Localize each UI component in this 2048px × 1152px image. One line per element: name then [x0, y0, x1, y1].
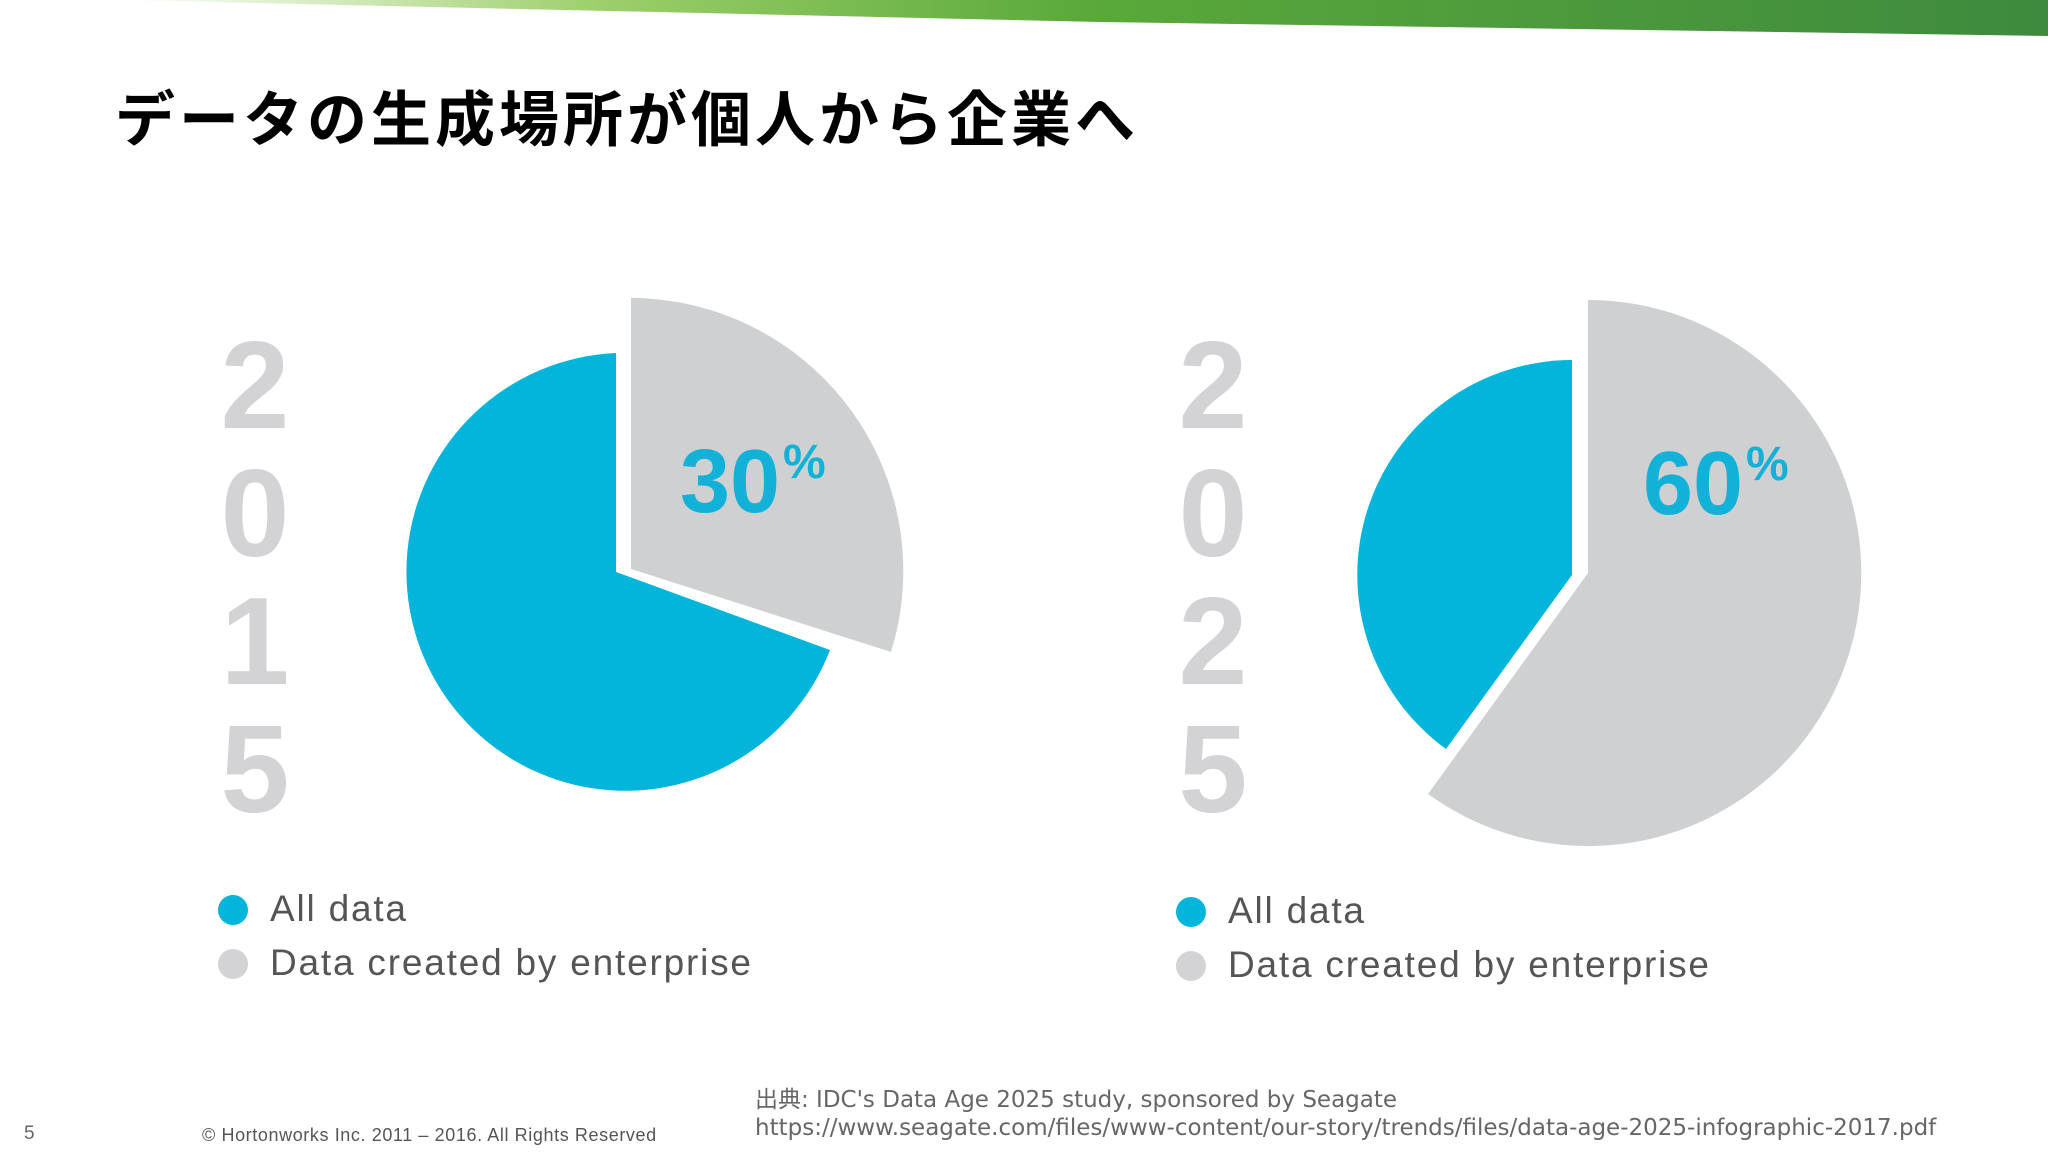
year label 2015: 1 — [221, 573, 289, 711]
title: データの生成場所が個人から企業へ — [115, 87, 1139, 154]
year label 2025: 2 — [1179, 573, 1247, 711]
pie chart 2015 — [406, 298, 904, 791]
chart panel: 2025 — [1176, 300, 1862, 985]
source citation: 出典: IDC's Data Age 2025 study, sponsored by Seagate — [755, 1087, 1397, 1113]
pie chart 2025: 60 — [1643, 434, 1743, 534]
top green banner — [147, 0, 2048, 36]
pie chart 2025 — [1357, 300, 1862, 846]
year label 2025 — [1179, 317, 1247, 839]
year label 2015: 2 — [221, 317, 289, 455]
chart panel: 2015 — [218, 298, 904, 983]
pie chart 2015: % — [783, 436, 826, 489]
legend 2025 — [1176, 890, 1711, 985]
year label 2015 — [221, 317, 289, 839]
legend 2025: Data created by enterprise — [1228, 944, 1711, 985]
pie chart 2015: 30 — [680, 432, 780, 532]
year label 2015: 5 — [221, 701, 289, 839]
legend 2025: All data — [1228, 890, 1366, 931]
year label 2015: 0 — [221, 445, 289, 583]
pie chart 2025: % — [1746, 438, 1789, 491]
source citation — [755, 1087, 1937, 1141]
legend 2015: All data — [270, 888, 408, 929]
source citation: https://www.seagate.com/files/www-content/our-story/trends/files/data-age-2025-infographic-2017.pdf — [755, 1115, 1936, 1141]
legend 2015 — [218, 888, 753, 983]
year label 2025: 5 — [1179, 701, 1247, 839]
copyright: © Hortonworks Inc. 2011 – 2016. All Rights Reserved — [202, 1125, 657, 1145]
legend 2015: Data created by enterprise — [270, 942, 753, 983]
page number: 5 — [24, 1123, 35, 1144]
year label 2025: 2 — [1179, 317, 1247, 455]
year label 2025: 0 — [1179, 445, 1247, 583]
